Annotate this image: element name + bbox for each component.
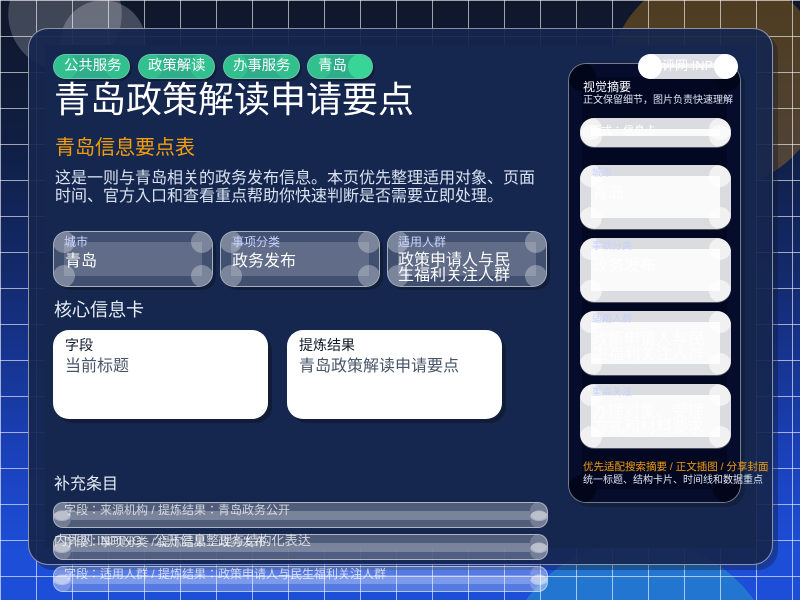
tag text: 公共服务: 公共服务: [64, 58, 122, 74]
side label: 重点关注: 重点关注: [592, 387, 632, 398]
glow circle: top left small: [60, 0, 146, 86]
label: 事项分类: 事项分类: [232, 235, 280, 249]
section heading: 补充条目: 补充条目: [54, 476, 118, 493]
value: 政务发布: 政务发布: [232, 253, 296, 270]
list row 1 text: 字段：来源机构 / 提炼结果：青岛政务公开: [64, 503, 290, 517]
list row 2 text: 字段：事项分类 / 提炼结果：政务发布: [64, 535, 266, 549]
value: 政策申请人与民生福利关注人群: 生福利关注人群: [398, 267, 510, 284]
glow circle: top left large: [0, 0, 130, 80]
side panel: visual summary: [568, 63, 741, 503]
side card: 事项分类: [580, 238, 731, 302]
mini pill text: 版式：信息卡: [590, 125, 656, 137]
source badge: [638, 54, 738, 79]
tag pill: 办事服务: [223, 54, 300, 79]
list row 3: [53, 566, 548, 592]
info card: 事项分类: [220, 231, 380, 287]
value: 政策申请人与民生福利关注人群: 政策申请人与民: [398, 252, 510, 269]
side card: 适用人群: [580, 311, 731, 375]
value: 政策申请人与民生福利关注人群: [398, 251, 510, 284]
card heading: 字段: 字段: [65, 337, 93, 353]
intro paragraph: 这是一则与青岛相关的政务发布信息。本页优先整理适用对象、页面: [55, 170, 535, 187]
side label: 适用人群: 适用人群: [592, 314, 632, 325]
title: 青岛政策解读申请要点: [54, 79, 414, 120]
value: 青岛: 青岛: [65, 253, 97, 270]
tag text: 青岛: 青岛: [318, 58, 347, 74]
list row 2: [53, 534, 548, 560]
white card: 提炼结果: [287, 330, 502, 419]
intro paragraph: [55, 169, 535, 205]
tag pill: 青岛: [307, 54, 373, 79]
label: 城市: 城市: [64, 235, 88, 249]
side value: 适用人群: [592, 332, 704, 362]
tag text: 办事服务: 办事服务: [233, 58, 291, 74]
section heading: 核心信息卡: 核心信息卡: [54, 300, 144, 320]
side subheading: 正文保留细节，图片负责快速理解: [583, 95, 733, 106]
side value: 重点关注: 方式和材料要求: [592, 419, 704, 436]
tag text: 政策解读: 政策解读: [148, 58, 206, 74]
side value: 政务发布: 政务发布: [592, 258, 656, 275]
tag pill: 政策解读: [138, 54, 215, 79]
side heading: 视觉摘要: [583, 80, 631, 94]
side footer note: 统一标题、结构卡片、时间线和数据重点: [583, 475, 763, 486]
side label: 事项分类: 事项分类: [592, 241, 632, 252]
mini pill: 版式: [580, 118, 731, 147]
label: 适用人群: 适用人群: [398, 235, 446, 249]
white card: 字段: [53, 330, 268, 419]
side card: 城市: [580, 165, 731, 229]
intro paragraph: 时间、官方入口和查看重点帮助你快速判断是否需要立即处理。: [55, 188, 503, 205]
list row 3 text: 字段：适用人群 / 提炼结果：政策申请人与民生福利关注人群: [64, 567, 386, 581]
side value: 青岛: 青岛: [592, 185, 624, 202]
tag pill: 公共服务: [53, 54, 130, 79]
info card: 适用人群: [387, 231, 547, 287]
side value: 重点关注: 办理对象、受理: [592, 404, 704, 421]
subtitle: 青岛信息要点表: [55, 137, 195, 159]
card value: 当前标题: 当前标题: [65, 358, 129, 375]
card value: 青岛政策解读申请要点: 青岛政策解读申请要点: [299, 358, 459, 375]
card heading: 提炼结果: 提炼结果: [299, 337, 355, 353]
side value: 适用人群: 生福利关注人群: [592, 346, 704, 363]
side footer highlight: 优先适配搜索摘要 / 正文插图 / 分享封面: [583, 461, 769, 473]
list row 1: [53, 502, 548, 528]
source badge text: 内评网 INPING: [649, 58, 736, 73]
info card: 城市: [53, 231, 213, 287]
side label: 城市: 城市: [592, 168, 612, 179]
side value: 重点关注: [592, 405, 704, 435]
footer source text: 内评网 INPING · 公开信息整理与结构化表达: [54, 533, 311, 548]
glow circle: top right amber: [600, 0, 800, 200]
side value: 适用人群: 政策申请人与民: [592, 331, 704, 348]
glow circle: bottom teal: [500, 530, 780, 600]
side card: 重点关注: [580, 384, 731, 448]
